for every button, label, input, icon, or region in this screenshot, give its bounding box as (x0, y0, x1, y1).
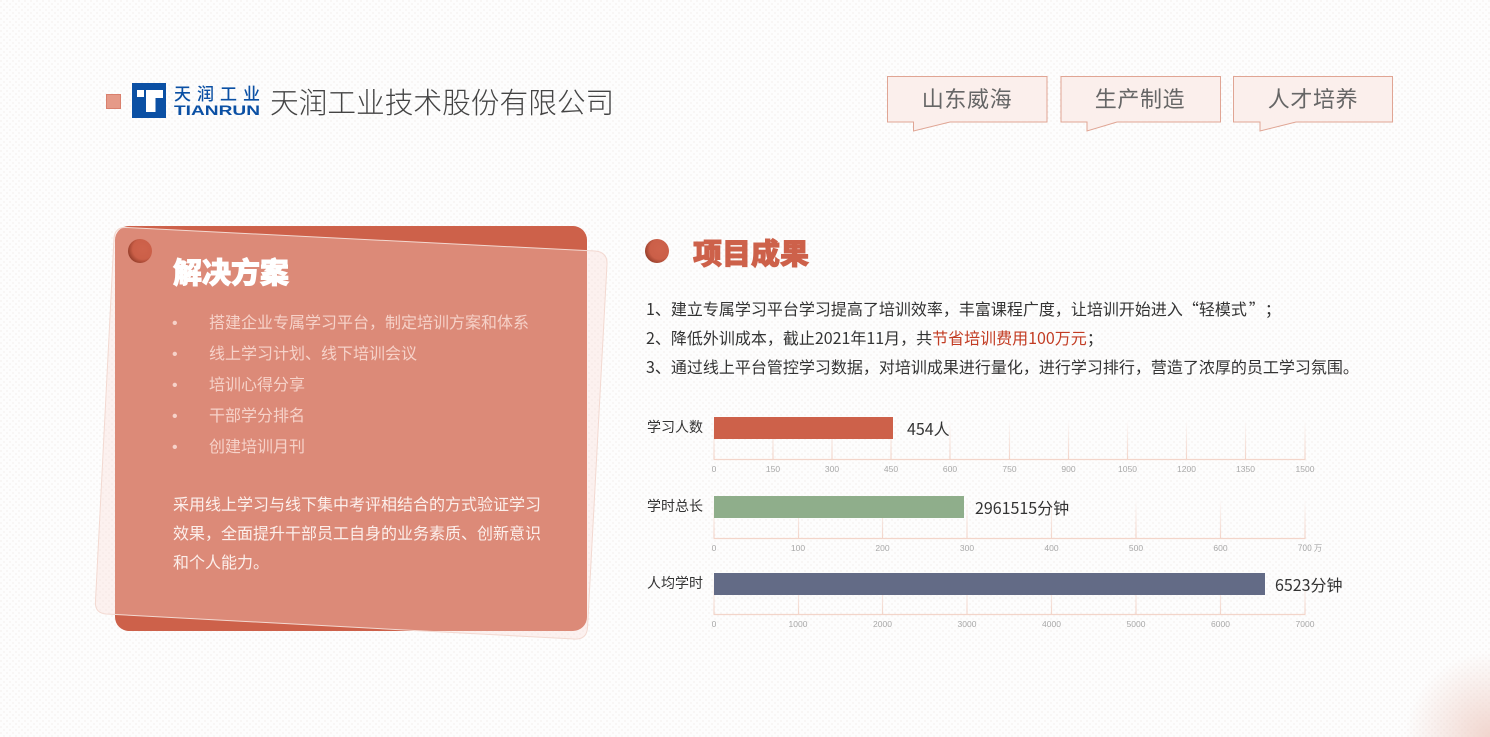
solution summary paragraph: 效果，全面提升干部员工自身的业务素质、创新意识 (173, 520, 541, 544)
bar chart: total hours: 2961515分钟 (975, 495, 1069, 519)
bar chart: average hours: 6523分钟 (1275, 572, 1343, 596)
solution bullet list: • (172, 315, 178, 332)
bar chart: total hours: 700 万 (1298, 542, 1322, 554)
solution bullet list: 创建培训月刊 (209, 433, 305, 457)
bar chart: learners: 1350 (1236, 464, 1255, 474)
results text block: 1、建立专属学习平台学习提高了培训效率，丰富课程广度，让培训开始进入“轻模式” ； (646, 296, 1281, 320)
panel: solution (95, 226, 607, 639)
bar chart: average hours: 5000 (1127, 619, 1146, 629)
results marker ball (645, 239, 669, 263)
solution summary paragraph (173, 491, 541, 573)
solution bullet list: • (172, 346, 178, 363)
solution bullet list: • (172, 408, 178, 425)
bar chart: learners: 150 (766, 464, 780, 474)
bar chart: average hours: 人均学时 (647, 573, 703, 593)
bar chart: total hours: 200 (875, 543, 890, 553)
tag: location: 山东威海 (922, 82, 1012, 114)
bar: 2961515 (714, 496, 964, 518)
panel heading: 解决方案 (173, 250, 289, 292)
solution bullet list: • (172, 377, 178, 394)
solution bullet list: 线上学习计划、线下培训会议 (209, 340, 417, 364)
solution bullet list: 搭建企业专属学习平台，制定培训方案和体系 (209, 309, 529, 333)
company logo: TIANRUN (174, 102, 260, 118)
company name: 天润工业技术股份有限公司 (270, 81, 614, 122)
bar chart: total hours: 100 (791, 543, 805, 553)
bar chart: learners: 450 (884, 464, 898, 474)
company logo (132, 80, 260, 118)
solution bullet list: 培训心得分享 (209, 371, 305, 395)
bar chart: average hours: 0 (712, 619, 717, 629)
solution bullet list: 干部学分排名 (209, 402, 305, 426)
solution bullet list: • (172, 439, 178, 456)
solution summary paragraph: 和个人能力。 (173, 549, 269, 573)
tag: talent: 人才培养 (1268, 82, 1358, 114)
panel tilted translucent card (95, 227, 607, 639)
company logo: 天润工业 (174, 80, 260, 105)
bar chart: total hours: 学时总长 (647, 496, 703, 516)
panel marker ball (128, 239, 152, 263)
results text block: 3、通过线上平台管控学习数据，对培训成果进行量化，进行学习排行，营造了浓厚的员工学习氛围。 (646, 354, 1359, 378)
bar: 454 (714, 417, 893, 439)
bar chart: average hours: 4000 (1042, 619, 1061, 629)
bar chart: average hours: 2000 (873, 619, 892, 629)
bar chart: learners: 1200 (1177, 464, 1196, 474)
bar chart: learners: 900 (1061, 464, 1076, 474)
tag: talent (1234, 76, 1392, 131)
bar chart: total hours (647, 495, 1322, 554)
bar chart: total hours: 0 (712, 543, 717, 553)
bar chart: average hours: 6000 (1211, 619, 1230, 629)
bar chart: learners: 750 (1002, 464, 1017, 474)
header marker square (106, 94, 120, 108)
tag: industry (1061, 76, 1220, 131)
bar chart: total hours: 300 (960, 543, 974, 553)
tag: industry: 生产制造 (1095, 82, 1185, 114)
panel back card (115, 226, 587, 631)
bar chart: average hours: 3000 (958, 619, 977, 629)
bar chart: learners: 300 (825, 464, 839, 474)
bar chart: average hours (647, 572, 1343, 629)
bar chart: learners: 1500 (1296, 464, 1315, 474)
bar chart: total hours: 500 (1129, 543, 1143, 553)
bar chart: learners: 1050 (1118, 464, 1137, 474)
results title: 项目成果 (693, 231, 809, 273)
header: company (106, 80, 614, 122)
bar chart: learners: 600 (943, 464, 957, 474)
tag: location (888, 76, 1047, 131)
results text block (646, 296, 1359, 378)
bar chart: total hours: 600 (1213, 543, 1228, 553)
bar chart: average hours: 7000 (1296, 619, 1315, 629)
bar chart: learners: 454人 (907, 416, 950, 440)
solution bullet list (172, 309, 529, 457)
bar chart: average hours: 1000 (789, 619, 808, 629)
solution summary paragraph: 采用线上学习与线下集中考评相结合的方式验证学习 (173, 491, 541, 515)
bar chart: learners: 0 (712, 464, 717, 474)
results text block: 2、降低外训成本，截止2021年11月，共节省培训费用100万元； (646, 325, 1103, 349)
section heading: results (645, 231, 809, 273)
bar chart: learners: 学习人数 (647, 417, 703, 437)
bar chart: learners (647, 416, 1315, 474)
bar chart: total hours: 400 (1044, 543, 1059, 553)
bar: 6523 (714, 573, 1265, 595)
